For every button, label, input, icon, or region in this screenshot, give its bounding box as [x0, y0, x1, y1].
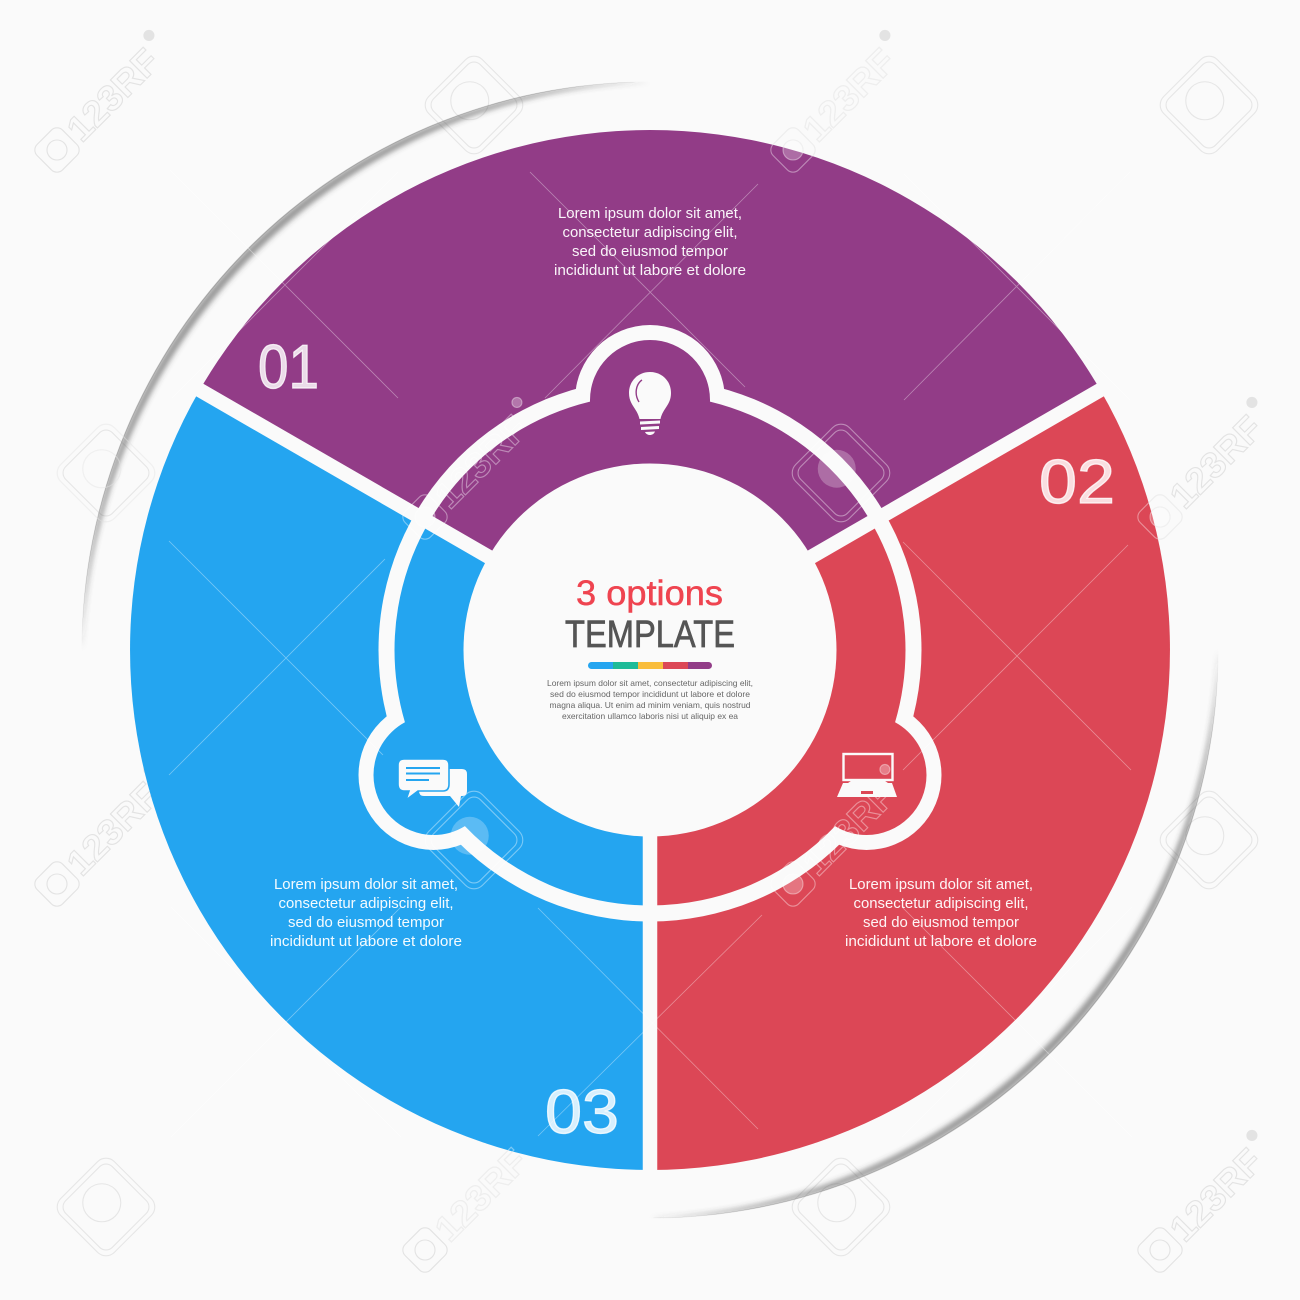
centre hole	[464, 464, 836, 836]
watermark: stock logos on background: 123RF	[58, 40, 167, 149]
panel 01: text	[258, 206, 746, 402]
body text 03: sed do eiusmod tempor	[288, 915, 444, 931]
body text 03: consectetur adipiscing elit,	[278, 896, 454, 912]
body text 02: sed do eiusmod tempor	[863, 915, 1019, 931]
shadow arc: bottom right	[650, 650, 1218, 1218]
inner segment purple	[432, 340, 868, 551]
body text 02: consectetur adipiscing elit,	[854, 896, 1028, 912]
inner pie segments	[374, 340, 926, 906]
paper-cut shadow arcs	[82, 82, 1218, 1218]
watermark: stock logos on background: 123RF	[426, 407, 535, 516]
watermark: overlays on coloured areas: 123RF	[426, 1140, 535, 1249]
panel 03: text	[270, 877, 619, 1147]
shadow arc: top left	[82, 82, 650, 650]
watermark: overlays on coloured areas: 123RF	[794, 40, 903, 149]
centre title block	[547, 574, 753, 721]
colour bar	[588, 662, 712, 669]
segment 02 red	[650, 390, 1170, 1170]
centre description text: Lorem ipsum dolor sit amet, consectetur adipiscing elit,	[547, 678, 753, 688]
heading: 3 options: 3 options	[576, 574, 723, 613]
body text 01	[554, 206, 746, 279]
watermark: overlays on coloured areas: 123RF	[426, 407, 535, 516]
segment gaps	[191, 385, 1109, 1180]
panel 02: text	[845, 448, 1115, 950]
watermark: stock logos on background: 123RF	[1161, 1140, 1270, 1249]
segment 03 blue	[130, 390, 650, 1170]
body text 03	[270, 877, 462, 950]
number 02: 02	[1039, 448, 1115, 517]
watermark: thin crossing lines	[169, 170, 1132, 1137]
body text 01: incididunt ut labore et dolore	[554, 263, 746, 279]
icon: light bulb	[629, 372, 671, 435]
centre description text	[547, 678, 753, 721]
number 03: 03	[545, 1078, 619, 1147]
watermark: stock logos on background: 123RF	[426, 1140, 535, 1249]
watermark: overlays on coloured areas: 123RF	[794, 774, 903, 883]
body text 01: sed do eiusmod tempor	[572, 244, 728, 260]
body text 03: Lorem ipsum dolor sit amet,	[274, 877, 458, 893]
body text 01: Lorem ipsum dolor sit amet,	[558, 206, 742, 222]
icon: speech bubbles	[398, 759, 467, 807]
watermark: stock logos on background: 123RF	[794, 774, 903, 883]
body text 02: incididunt ut labore et dolore	[845, 934, 1037, 950]
white trefoil ring outline	[358, 325, 942, 922]
watermark: stock logos on background: 123RF	[794, 40, 903, 149]
segment 01 purple	[200, 130, 1100, 650]
watermark: stock logos on background: 123RF	[58, 774, 167, 883]
inner segment red	[657, 528, 926, 906]
body text 03: incididunt ut labore et dolore	[270, 934, 462, 950]
body text 01: consectetur adipiscing elit,	[562, 225, 738, 241]
watermark: stock logos on background: 123RF	[1161, 407, 1270, 516]
icon: laptop	[837, 754, 897, 797]
heading: TEMPLATE: TEMPLATE	[565, 614, 735, 656]
body text 02	[845, 877, 1037, 950]
outer pie segments	[130, 130, 1170, 1170]
centre description text: sed do eiusmod tempor incididunt ut labore et dolore	[550, 689, 750, 699]
body text 02: Lorem ipsum dolor sit amet,	[849, 877, 1033, 893]
inner segment blue	[374, 528, 643, 906]
centre description text: magna aliqua. Ut enim ad minim veniam, quis nostrud	[550, 700, 751, 710]
number 01: 01	[258, 333, 319, 402]
centre description text: exercitation ullamco laboris nisi ut aliquip ex ea	[562, 711, 738, 721]
